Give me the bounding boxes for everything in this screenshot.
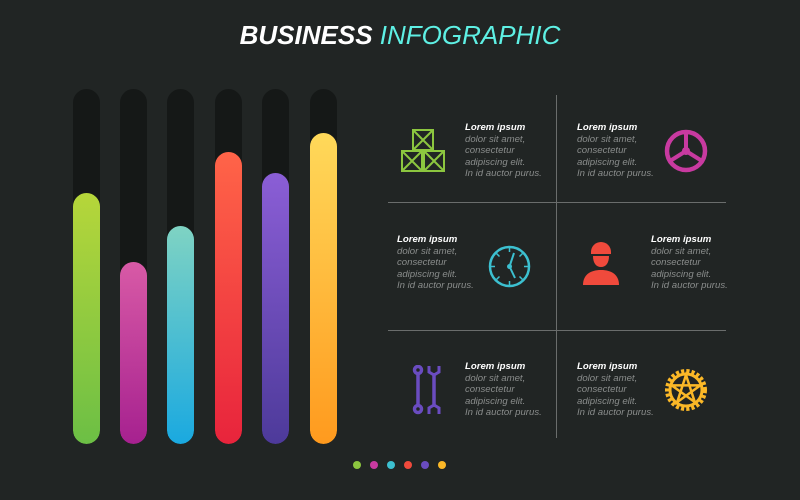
icon: boxes — [401, 129, 445, 172]
text block 3: dolor sit amet, — [397, 246, 457, 257]
icon: gear — [665, 369, 707, 411]
text block 6 — [577, 361, 654, 418]
text block 4: In id auctor purus. — [651, 280, 728, 291]
text block 4: Lorem ipsum — [651, 234, 711, 245]
text block 4: dolor sit amet, — [651, 246, 711, 257]
text block 3 — [397, 234, 474, 291]
text block 5: adipiscing elit. — [465, 396, 525, 407]
grid lines — [556, 95, 557, 438]
text block 1: dolor sit amet, — [465, 134, 525, 145]
bar chart — [73, 89, 337, 444]
text block 1 — [465, 122, 542, 179]
text block 4: adipiscing elit. — [651, 269, 711, 280]
text block 1: adipiscing elit. — [465, 157, 525, 168]
icon: clock — [488, 246, 530, 288]
text block 1: In id auctor purus. — [465, 168, 542, 179]
text block 3: Lorem ipsum — [397, 234, 457, 245]
text block 2: consectetur — [577, 145, 627, 156]
text block 6: Lorem ipsum — [577, 361, 637, 372]
text block 3: In id auctor purus. — [397, 280, 474, 291]
icon: steering wheel — [664, 130, 708, 172]
text block 5: consectetur — [465, 384, 515, 395]
icon: worker — [583, 242, 619, 285]
text block 6: adipiscing elit. — [577, 396, 637, 407]
text block 5: In id auctor purus. — [465, 407, 542, 418]
legend dots — [353, 461, 446, 469]
text block 1: consectetur — [465, 145, 515, 156]
text block 2: Lorem ipsum — [577, 122, 637, 133]
text block 4 — [651, 234, 728, 291]
title: BUSINESS INFOGRAPHIC — [240, 20, 560, 50]
text block 2 — [577, 122, 654, 179]
text block 5 — [465, 361, 542, 418]
text block 1: Lorem ipsum — [465, 122, 525, 133]
text block 6: consectetur — [577, 384, 627, 395]
text block 2: adipiscing elit. — [577, 157, 637, 168]
text block 3: consectetur — [397, 257, 447, 268]
icon: wrenches — [412, 365, 440, 414]
text block 2: dolor sit amet, — [577, 134, 637, 145]
text block 2: In id auctor purus. — [577, 168, 654, 179]
text block 3: adipiscing elit. — [397, 269, 457, 280]
text block 6: dolor sit amet, — [577, 373, 637, 384]
text block 5: dolor sit amet, — [465, 373, 525, 384]
text block 6: In id auctor purus. — [577, 407, 654, 418]
text block 4: consectetur — [651, 257, 701, 268]
text block 5: Lorem ipsum — [465, 361, 525, 372]
